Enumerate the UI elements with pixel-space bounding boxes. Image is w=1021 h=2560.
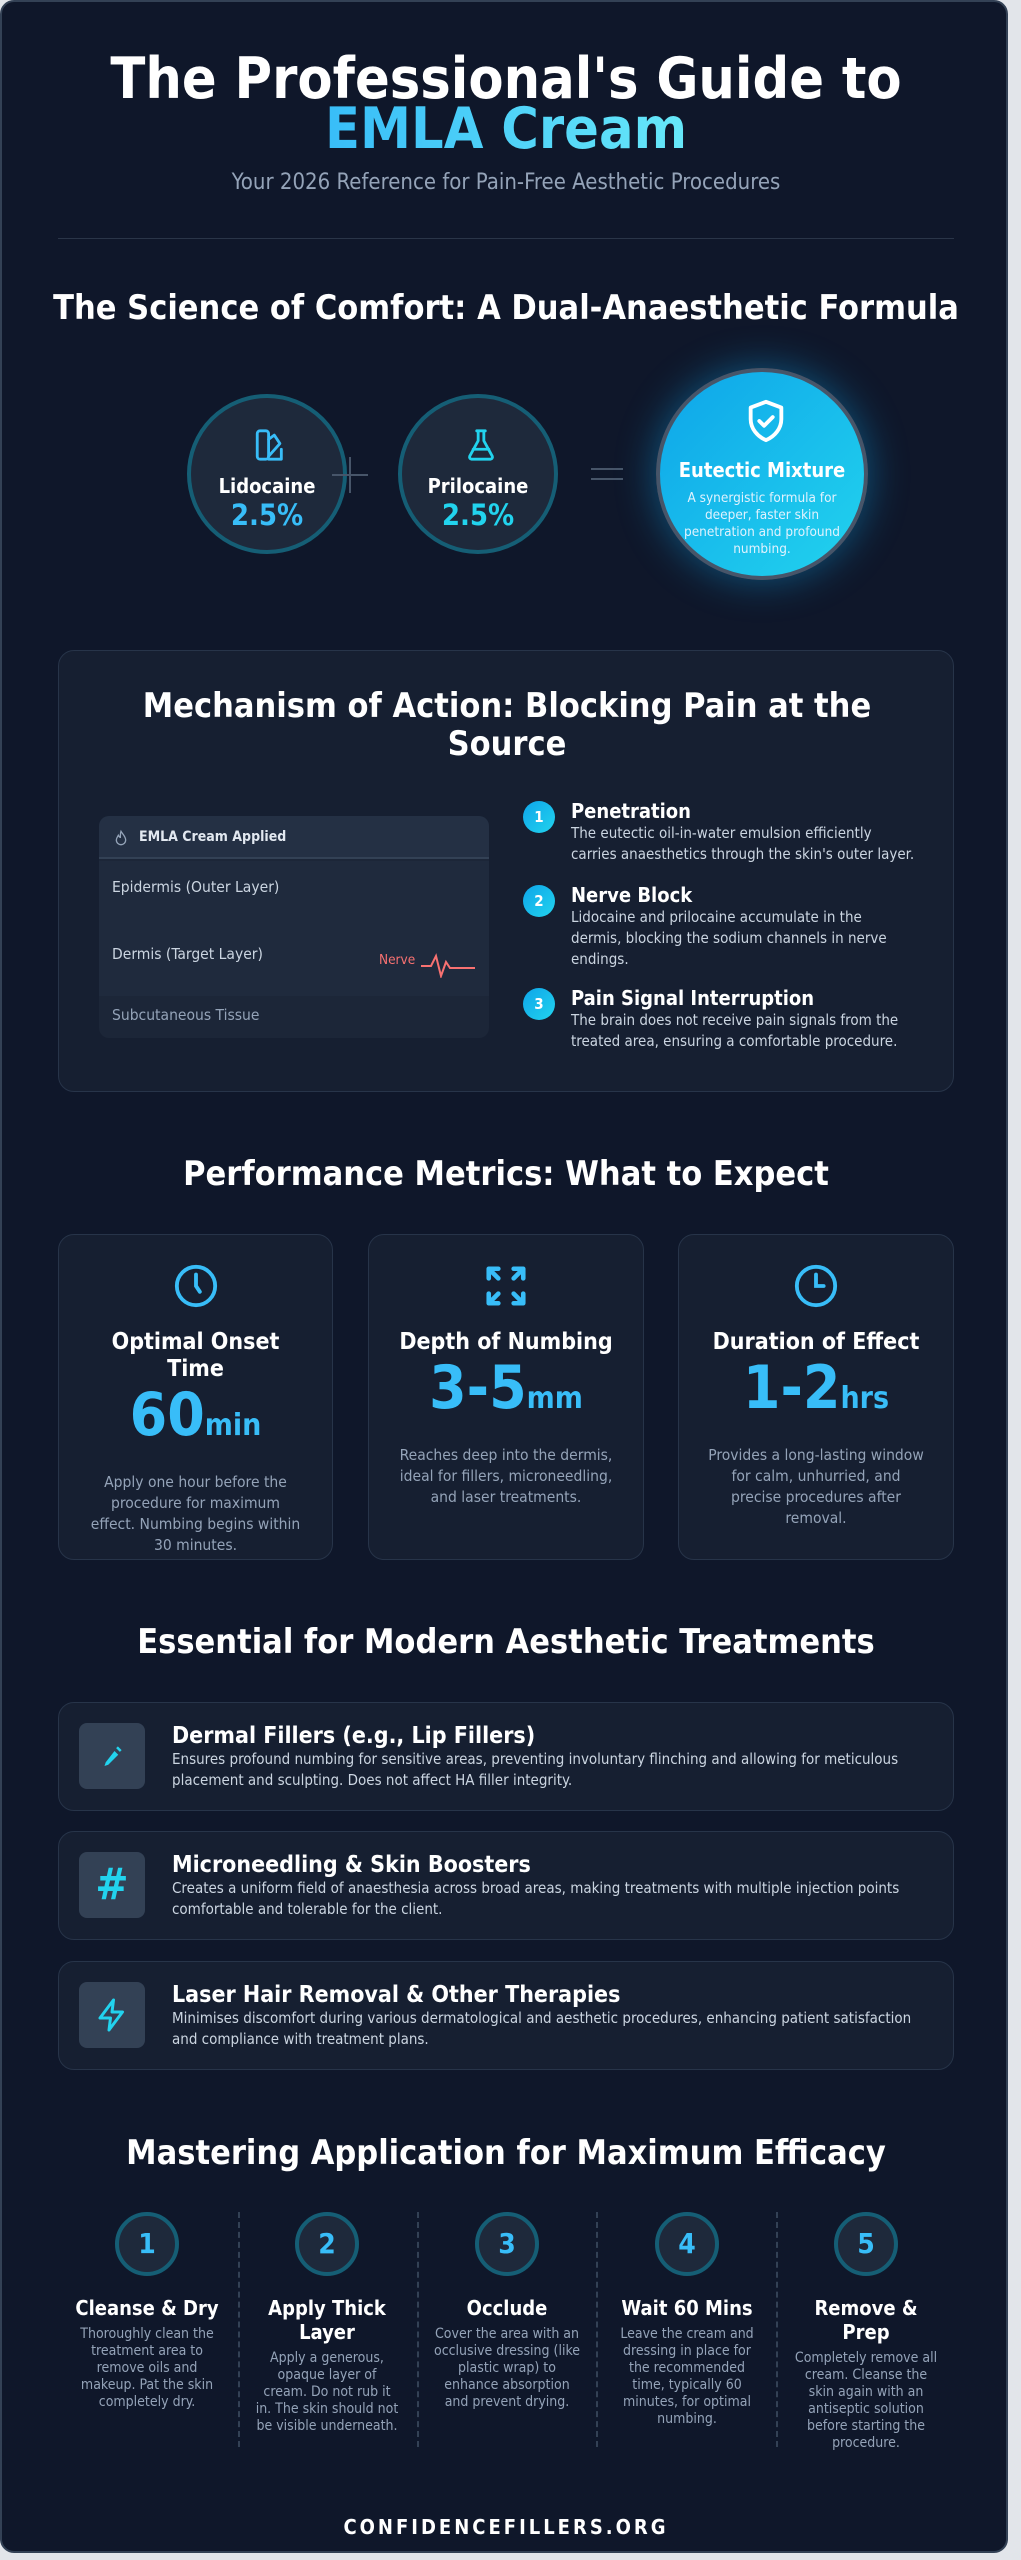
step 2: 2 bbox=[318, 2227, 336, 2260]
skin diagram: Dermis (Target Layer) bbox=[112, 945, 263, 963]
treatment: microneedling: Creates a uniform field of anaesthesia across broad areas, making treatments with multiple injection points comfortable and tolerable for the client. bbox=[172, 1879, 899, 1918]
step 5 bbox=[795, 2212, 937, 2451]
step 2: Nerve Block bbox=[571, 883, 692, 907]
step 2: Apply a generous, opaque layer of cream. Do not rub it in. The skin should not be visible underneath. bbox=[256, 2350, 398, 2434]
step 2: 2 bbox=[534, 892, 544, 910]
circle: lidocaine: Lidocaine bbox=[219, 474, 315, 498]
icon: hash bbox=[79, 1852, 145, 1918]
circle: lidocaine: 2.5% bbox=[231, 498, 303, 532]
step 2: Apply Thick Layer bbox=[268, 2296, 386, 2344]
metric: depth: Depth of Numbing bbox=[399, 1329, 613, 1355]
skin diagram: Subcutaneous Tissue bbox=[112, 1006, 259, 1024]
step 1 bbox=[75, 2212, 219, 2410]
metric: duration: 1-2hrs bbox=[743, 1353, 889, 1423]
metric: depth: Reaches deep into the dermis, ideal for fillers, microneedling, and laser treatments. bbox=[400, 1446, 612, 1506]
metric: onset: 60min bbox=[130, 1380, 261, 1450]
heading: Mechanism of Action: Blocking Pain at the Source bbox=[143, 686, 871, 764]
metric: depth: 3-5mm bbox=[429, 1353, 583, 1423]
metric: depth bbox=[368, 1234, 644, 1560]
treatment: laser bbox=[58, 1961, 954, 2070]
step 5: Remove & Prep bbox=[814, 2296, 918, 2344]
skin diagram: Epidermis (Outer Layer) bbox=[112, 878, 279, 896]
subtitle: Your 2026 Reference for Pain-Free Aesthetic Procedures bbox=[232, 170, 780, 195]
footer: CONFIDENCEFILLERS.ORG bbox=[343, 2515, 669, 2539]
step 3: The brain does not receive pain signals from the treated area, ensuring a comfortable procedure. bbox=[571, 1011, 898, 1050]
step 1: 1 bbox=[138, 2227, 156, 2260]
icon: equals bbox=[591, 468, 623, 480]
step 3 bbox=[434, 2212, 580, 2410]
step 4: Wait 60 Mins bbox=[621, 2296, 753, 2320]
icon: flask bbox=[468, 429, 494, 461]
icon: drop bbox=[116, 830, 126, 846]
step 2: Lidocaine and prilocaine accumulate in the dermis, blocking the sodium channels in nerve endings. bbox=[571, 908, 887, 968]
metric: duration: Provides a long-lasting window for calm, unhurried, and precise procedures after removal. bbox=[708, 1446, 924, 1527]
step 4: 4 bbox=[678, 2227, 696, 2260]
section heading: metrics: Performance Metrics: What to Expect bbox=[183, 1154, 829, 1194]
treatment: laser: Minimises discomfort during various dermatological and aesthetic procedures, enhancing patient satisfaction and compliance with treatment plans. bbox=[172, 2009, 911, 2048]
step 4 bbox=[620, 2212, 754, 2427]
panel: mechanism bbox=[58, 650, 954, 1092]
title: The Professional's Guide to bbox=[110, 46, 902, 112]
treatment: dermal fillers: Ensures profound numbing for sensitive areas, preventing involuntary flinching and allowing for meticulous placement and sculpting. Does not affect HA filler integrity. bbox=[172, 1750, 898, 1789]
treatment: microneedling bbox=[58, 1831, 954, 1940]
circle: eutectic mixture bbox=[656, 368, 868, 580]
section heading: treatments: Essential for Modern Aesthetic Treatments bbox=[137, 1622, 875, 1662]
step 3: Occlude bbox=[467, 2296, 547, 2320]
circle: eutectic mixture: A synergistic formula for deeper, faster skin penetration and profound numbing. bbox=[684, 490, 840, 557]
metric: onset: Optimal Onset Time bbox=[112, 1329, 279, 1382]
nerve label: Nerve bbox=[379, 952, 415, 968]
circle: prilocaine: Prilocaine bbox=[428, 474, 528, 498]
step 4: Leave the cream and dressing in place for the recommended time, typically 60 minutes, for optimal numbing. bbox=[620, 2326, 754, 2427]
icon: swatch bbox=[256, 429, 283, 461]
icon: hash: # bbox=[95, 1859, 129, 1910]
metric: onset bbox=[58, 1234, 333, 1560]
circle: prilocaine bbox=[398, 394, 558, 554]
step 3: 3 bbox=[498, 2227, 516, 2260]
step 2 bbox=[256, 2212, 398, 2434]
circle: prilocaine: 2.5% bbox=[442, 498, 514, 532]
step 1: Penetration bbox=[571, 799, 691, 823]
icon: syringe bbox=[79, 1723, 145, 1789]
circle: eutectic mixture: Eutectic Mixture bbox=[679, 458, 845, 482]
step 1: The eutectic oil-in-water emulsion efficiently carries anaesthetics through the skin's outer layer. bbox=[571, 824, 914, 863]
metric: onset: Apply one hour before the procedure for maximum effect. Numbing begins within 30 minutes. bbox=[91, 1473, 300, 1554]
step 5: 5 bbox=[857, 2227, 875, 2260]
title bbox=[110, 46, 902, 162]
treatment: laser: Laser Hair Removal & Other Therapies bbox=[172, 1982, 620, 2008]
treatment: dermal fillers: Dermal Fillers (e.g., Lip Fillers) bbox=[172, 1723, 535, 1749]
section heading: science: The Science of Comfort: A Dual-Anaesthetic Formula bbox=[53, 288, 959, 328]
treatment: microneedling: Microneedling & Skin Boosters bbox=[172, 1852, 531, 1878]
step 1: Thoroughly clean the treatment area to remove oils and makeup. Pat the skin completely dry. bbox=[80, 2326, 214, 2410]
step 1: Cleanse & Dry bbox=[75, 2296, 219, 2320]
step 1 bbox=[523, 799, 914, 863]
icon: plus bbox=[332, 457, 368, 493]
skin diagram bbox=[99, 816, 489, 1038]
title: EMLA Cream bbox=[325, 96, 687, 162]
metric: duration bbox=[678, 1234, 954, 1560]
treatment: dermal fillers bbox=[58, 1702, 954, 1811]
icon: lightning bbox=[79, 1982, 145, 2048]
section heading: application: Mastering Application for Maximum Efficacy bbox=[126, 2133, 886, 2173]
step 3: 3 bbox=[534, 995, 544, 1013]
step 3: Cover the area with an occlusive dressing (like plastic wrap) to enhance absorption and prevent drying. bbox=[434, 2326, 580, 2410]
step 1: 1 bbox=[534, 808, 544, 826]
icon: shield bbox=[748, 400, 784, 442]
step 3: Pain Signal Interruption bbox=[571, 986, 814, 1010]
metric: duration: Duration of Effect bbox=[713, 1329, 919, 1355]
skin diagram: EMLA Cream Applied bbox=[139, 829, 286, 845]
circle: lidocaine bbox=[187, 394, 347, 554]
step 2 bbox=[523, 883, 887, 968]
step 5: Completely remove all cream. Cleanse the skin again with an antiseptic solution before starting the procedure. bbox=[795, 2350, 937, 2451]
step 3 bbox=[523, 986, 898, 1050]
